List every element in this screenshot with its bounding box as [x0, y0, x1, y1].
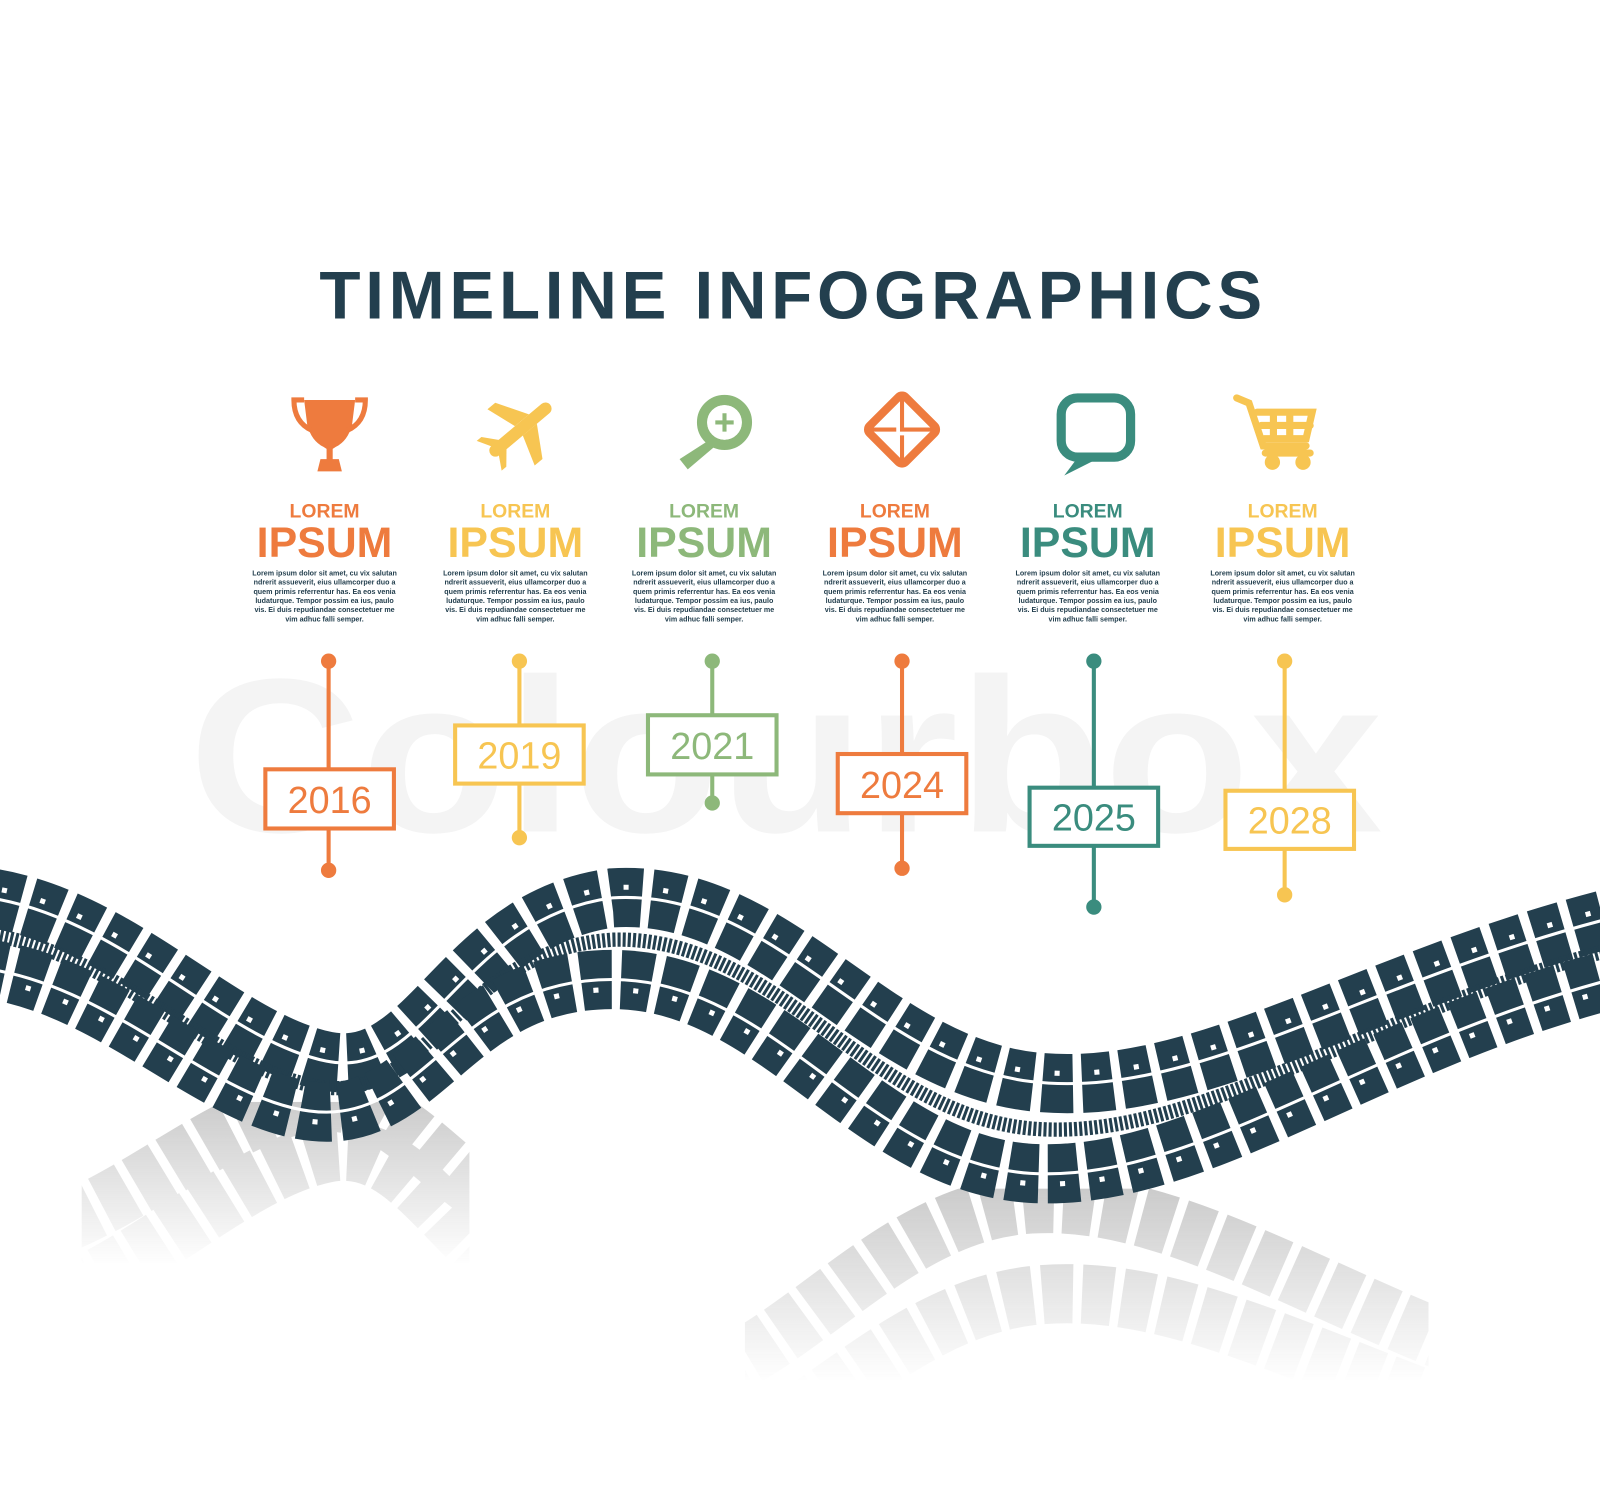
tire track — [0, 887, 1600, 1184]
body texts: ndrerit assueverit, eius ullamcorper duo a — [444, 579, 587, 587]
body texts: Lorem ipsum dolor sit amet, cu vix salutan — [252, 569, 397, 577]
marker: 2028: 2028 — [1248, 800, 1332, 842]
body texts: quem primis referrentur has. Ea eos venia — [1017, 588, 1160, 596]
text block: 2028: IPSUM — [1215, 519, 1350, 567]
body texts: quem primis referrentur has. Ea eos venia — [633, 588, 776, 596]
body texts: vis. Ei duis repudiandae consectetuer me — [254, 606, 395, 614]
marker: 2025: 2025 — [1052, 797, 1136, 839]
text block: 2024: IPSUM — [827, 519, 963, 567]
body texts: ludaturque. Tempor possim ea ius, paulo — [255, 597, 394, 605]
body texts: vis. Ei duis repudiandae consectetuer me — [634, 606, 774, 614]
body texts: Lorem ipsum dolor sit amet, cu vix salutan — [1210, 569, 1355, 577]
body texts: vis. Ei duis repudiandae consectetuer me — [1018, 606, 1158, 614]
text block: 2019: LOREM — [480, 500, 550, 522]
icon: airplane — [466, 376, 574, 484]
body texts: ludaturque. Tempor possim ea ius, paulo — [446, 597, 585, 605]
reflection: right — [745, 1188, 1428, 1350]
body texts: vim adhuc falli semper. — [665, 615, 743, 623]
body texts: quem primis referrentur has. Ea eos venia — [824, 588, 967, 596]
icon: trophy — [294, 400, 365, 471]
text block: 2021: LOREM — [669, 500, 739, 522]
marker: 2019 — [455, 654, 584, 845]
column headings — [257, 500, 1350, 567]
body texts: Lorem ipsum dolor sit amet, cu vix salutan — [632, 569, 776, 577]
body texts: quem primis referrentur has. Ea eos venia — [253, 588, 397, 596]
body texts: Lorem ipsum dolor sit amet, cu vix salutan — [443, 569, 588, 577]
body texts: Lorem ipsum dolor sit amet, cu vix salutan — [823, 569, 967, 577]
body texts: vis. Ei duis repudiandae consectetuer me — [825, 606, 965, 614]
body texts: ludaturque. Tempor possim ea ius, paulo — [635, 597, 774, 605]
marker: 2021 — [648, 654, 777, 810]
body texts: vis. Ei duis repudiandae consectetuer me — [1213, 606, 1353, 614]
body texts: vim adhuc falli semper. — [1243, 615, 1322, 623]
body texts: ludaturque. Tempor possim ea ius, paulo — [1019, 597, 1158, 605]
icon: magnifier — [680, 400, 747, 469]
marker: 2028 — [1225, 654, 1354, 902]
watermark: Colourbox — [189, 634, 1383, 879]
body texts: ndrerit assueverit, eius ullamcorper duo a — [1017, 579, 1160, 587]
icon: cart — [1237, 398, 1312, 466]
text block: 2028: LOREM — [1248, 500, 1318, 522]
body texts: vis. Ei duis repudiandae consectetuer me — [445, 606, 585, 614]
body texts: quem primis referrentur has. Ea eos venia — [1212, 588, 1355, 596]
body texts: vim adhuc falli semper. — [1049, 615, 1127, 623]
marker: 2016: 2016 — [288, 779, 372, 821]
body texts: ludaturque. Tempor possim ea ius, paulo — [826, 597, 965, 605]
icon: speech bubble — [1061, 398, 1131, 475]
icon: envelope — [866, 393, 938, 466]
marker: 2016 — [265, 654, 394, 877]
body texts: vim adhuc falli semper. — [856, 615, 934, 623]
body texts: Lorem ipsum dolor sit amet, cu vix salutan — [1015, 569, 1160, 577]
body texts: ndrerit assueverit, eius ullamcorper duo a — [633, 579, 776, 587]
text block: 2025: IPSUM — [1020, 519, 1156, 567]
body texts: quem primis referrentur has. Ea eos venia — [444, 588, 587, 596]
marker: 2024: 2024 — [860, 764, 944, 806]
text block: 2021: IPSUM — [636, 519, 772, 567]
reflection: left — [82, 1102, 470, 1238]
marker: 2024 — [838, 654, 966, 875]
marker: 2019: 2019 — [477, 734, 561, 776]
text block: 2025: LOREM — [1053, 500, 1123, 522]
body texts: ludaturque. Tempor possim ea ius, paulo — [1213, 597, 1352, 605]
text block: 2024: LOREM — [860, 500, 930, 522]
body texts: ndrerit assueverit, eius ullamcorper duo a — [254, 579, 396, 587]
body texts: vim adhuc falli semper. — [476, 615, 555, 623]
body texts: ndrerit assueverit, eius ullamcorper duo a — [1212, 579, 1355, 587]
text block: 2019: IPSUM — [447, 519, 583, 567]
body texts — [252, 569, 1355, 623]
title: TIMELINE INFOGRAPHICS — [319, 258, 1262, 333]
text block: 2016: IPSUM — [257, 519, 392, 567]
marker: 2021: 2021 — [670, 725, 754, 767]
text block: 2016: LOREM — [290, 500, 360, 522]
marker: 2025 — [1030, 654, 1158, 914]
body texts: vim adhuc falli semper. — [285, 615, 364, 623]
body texts: ndrerit assueverit, eius ullamcorper duo a — [824, 579, 967, 587]
